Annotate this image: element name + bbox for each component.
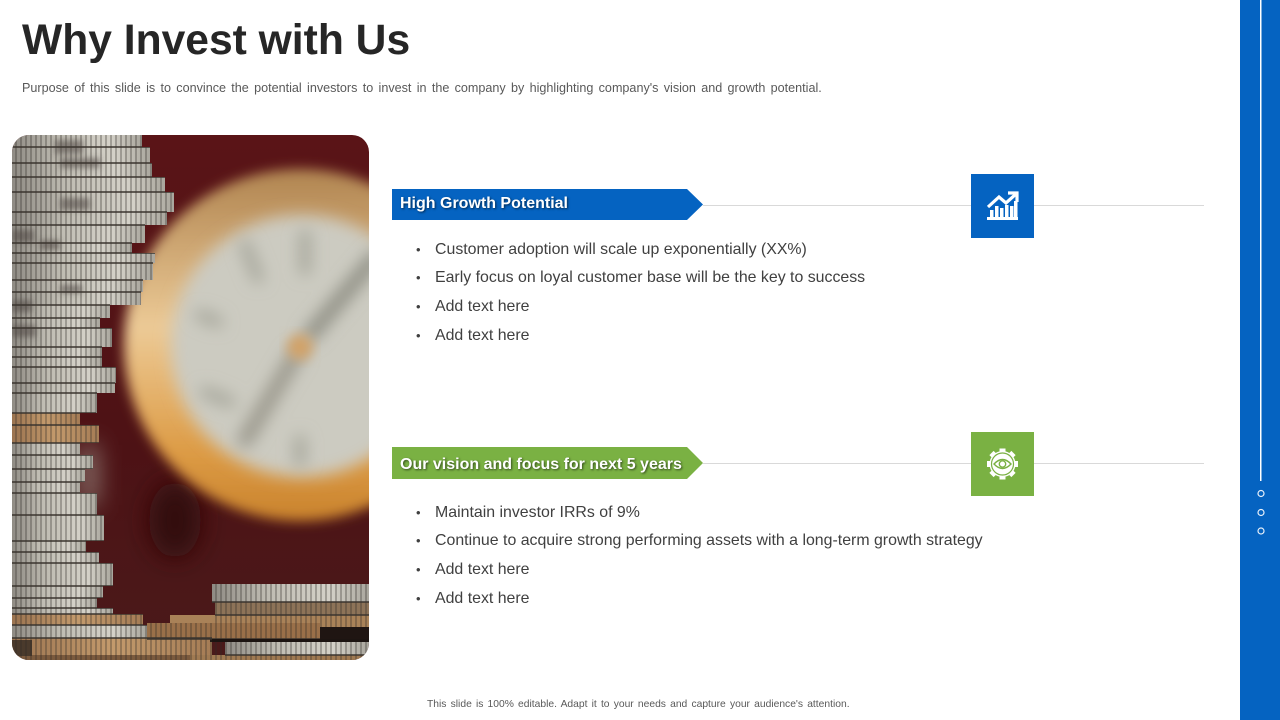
section 1 bullet list: Add text here xyxy=(435,327,530,344)
section 2 connector line xyxy=(703,463,1204,464)
section 1 bullet list: Add text here xyxy=(435,298,530,315)
section 2 bullet list: Add text here xyxy=(435,590,530,607)
coin ridges and shadow lines xyxy=(12,135,369,660)
section 1 bullet list: • xyxy=(416,299,421,314)
clock xyxy=(114,160,369,530)
section 2 bullet list: • xyxy=(416,505,421,520)
section 2 bullet list: • xyxy=(416,562,421,577)
section 1 bullet list: Customer adoption will scale up exponentially (XX%) xyxy=(435,241,807,258)
coin stack: right column xyxy=(147,584,369,660)
section 1 bullet list: Early focus on loyal customer base will be the key to success xyxy=(435,269,865,286)
section 2 bullet list: • xyxy=(416,591,421,606)
section 2 bullet list: Add text here xyxy=(435,561,530,578)
section 1 heading: High Growth Potential xyxy=(400,195,568,212)
section 1 bullet list: • xyxy=(416,270,421,285)
section 2 bullet list: Maintain investor IRRs of 9% xyxy=(435,504,640,521)
section 2 bullet list: • xyxy=(416,533,421,548)
section 2 heading: Our vision and focus for next 5 years xyxy=(400,456,682,473)
icon: growth chart xyxy=(971,174,1034,238)
section 2 bullet list: Continue to acquire strong performing assets with a long-term growth strategy xyxy=(435,532,983,549)
section 1 connector line xyxy=(703,205,1204,206)
section 1 bullet list: • xyxy=(416,328,421,343)
section 1 bullet list: • xyxy=(416,242,421,257)
icon: gear with eye xyxy=(971,432,1034,496)
photo: coin stacks and blurred clock xyxy=(12,135,369,660)
footer note: This slide is 100% editable. Adapt it to your needs and capture your audience's attention. xyxy=(427,699,850,710)
section 1 heading banner xyxy=(392,189,703,220)
section 2 bullet list xyxy=(416,504,983,607)
title: Why Invest with Us xyxy=(22,16,410,64)
section 1 bullet list xyxy=(416,241,865,344)
section 2 heading banner xyxy=(392,447,703,479)
sidebar with navigation dots xyxy=(1240,0,1280,720)
coin stack: left column xyxy=(12,135,212,660)
subtitle: Purpose of this slide is to convince the potential investors to invest in the company by highlighting company's vision and growth potential. xyxy=(22,81,822,95)
